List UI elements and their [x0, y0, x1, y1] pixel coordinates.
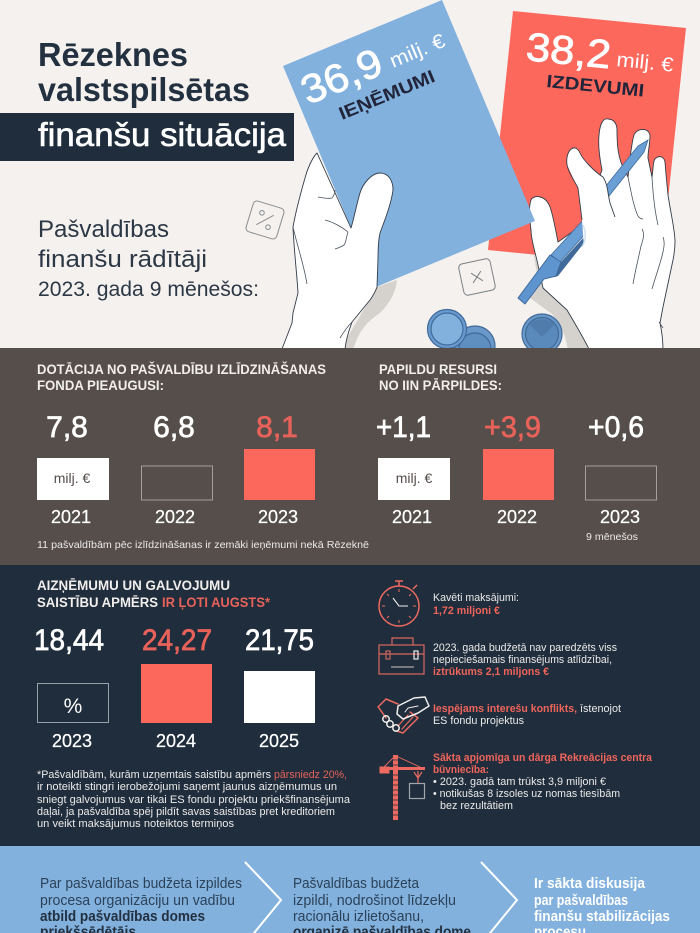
text: recreation centre: [433, 752, 653, 812]
bar chart: grant: 6,8: [153, 411, 195, 444]
pen: [518, 140, 648, 304]
text: late payments: Kavēti maksājumi:: [433, 592, 519, 604]
bar chart: grant: [37, 411, 315, 527]
text: discussion started: finanšu stabilizācijas: [534, 908, 670, 925]
bar chart: extra resources: 2023: [600, 507, 640, 527]
subtitle: 2023. gada 9 mēnešos:: [38, 278, 259, 301]
text: mayor responsibility: Par pašvaldības budžeta izpildes: [40, 875, 242, 892]
text: conflict of interest: īstenojot: [580, 703, 621, 715]
text: salary shortfall: 2023. gada budžetā nav paredzēts viss: [433, 642, 617, 654]
heading: grant: DOTĀCIJA NO PAŠVALDĪBU IZLĪDZINĀŠANAS: [37, 362, 326, 377]
hand shadows: [340, 250, 590, 350]
red paper: expenses: [488, 11, 686, 267]
icon: multiply card: [458, 258, 496, 296]
footnote: debt: *Pašvaldībām, kurām uzņemtais saistību apmērs: [37, 769, 271, 781]
bar chart: extra resources: +3,9: [484, 411, 541, 444]
red paper: expenses: milj. €: [616, 49, 674, 77]
bar chart: extra resources: milj. €: [396, 470, 432, 486]
panel: grants and extra resources: [0, 348, 700, 565]
heading: debt: AIZŅĒMUMU UN GALVOJUMU: [37, 578, 230, 593]
title: valstspilsētas: [38, 71, 250, 108]
text: mayor responsibility: [40, 875, 242, 933]
index finger and palm over the pen: [567, 148, 615, 270]
bar chart: debt: 21,75: [245, 624, 314, 657]
bar chart: grant: 2023: [258, 507, 298, 527]
text: salary shortfall: [433, 642, 617, 678]
title: Rēzeknes: [38, 36, 188, 73]
bar chart: debt: 2024: [156, 731, 196, 751]
coins: [428, 310, 562, 366]
heading: extra resources: NO IIN PĀRPILDES:: [379, 378, 502, 393]
bar chart: debt: 2025: [259, 731, 299, 751]
subtitle: Pašvaldības: [38, 216, 169, 243]
red paper: expenses: IZDEVUMI: [546, 71, 645, 101]
icon: stopwatch: [379, 581, 419, 626]
heading: debt: IR ĻOTI AUGSTS*: [162, 595, 271, 610]
text: recreation centre: bez rezultātiem: [440, 800, 513, 812]
heading: debt: SAISTĪBU APMĒRS: [37, 595, 158, 610]
bar chart: debt: 2023: [52, 731, 92, 751]
red paper: expenses: 38,2: [524, 25, 613, 77]
text: late payments: 1,72 miljoni €: [433, 605, 500, 617]
text: salary shortfall: nepieciešamais finansējums atlīdzībai,: [433, 654, 612, 666]
text: recreation centre: Sākta apjomīga un dārga Rekreācijas centra: [433, 752, 653, 764]
bar chart: debt: [34, 624, 315, 751]
blue paper: revenue: 36,9: [295, 41, 389, 113]
text: conflict of interest: ES fondu projektus: [433, 715, 524, 727]
bar chart: debt: 24,27: [142, 624, 212, 657]
icon: percent card: [245, 200, 285, 240]
icon: briefcase: [379, 638, 424, 674]
text: mayor responsibility: atbild pašvaldības domes: [40, 908, 205, 925]
icon: construction crane: [380, 755, 425, 820]
text: recreation centre: • 2023. gadā tam trūkst 3,9 miljoni €: [433, 776, 606, 788]
bar chart: extra resources: 2021: [392, 507, 432, 527]
arrow: chevron one: [245, 862, 281, 933]
bar chart: debt: %: [64, 695, 82, 718]
text: discussion started: [534, 875, 670, 933]
title: finanšu situācija: [38, 116, 287, 153]
text: late payments: [433, 592, 519, 617]
text: mayor responsibility: procesa organizāciju un vadību: [40, 892, 235, 909]
blue paper: revenue: [283, 0, 535, 287]
bar chart: grant: 7,8: [46, 411, 88, 444]
heading: extra resources: PAPILDU RESURSI: [379, 362, 497, 377]
blue paper: revenue: IEŅĒMUMI: [336, 66, 438, 124]
footnote: debt: daļai, ja pašvaldība spēj pildīt savas saistības pret kreditoriem: [37, 806, 335, 818]
panel: debt obligations: [0, 565, 700, 846]
right hand: [530, 119, 675, 351]
subtitle: [38, 216, 259, 301]
left hand: [282, 153, 393, 349]
text: conflict of interest: [433, 703, 621, 727]
blue paper: revenue: milj. €: [386, 30, 448, 73]
text: conflict of interest: Iespējams interešu konflikts,: [433, 703, 577, 715]
footnote: debt: un veikt maksājumus noteiktos termiņos: [37, 818, 234, 830]
bar chart: grant: 2022: [155, 507, 195, 527]
footnote: debt: ir noteikti stingri ierobežojumi saņemt jaunus aizņēmumus un: [37, 781, 337, 793]
bar chart: grant: 8,1: [256, 411, 298, 444]
bar chart: grant: milj. €: [54, 470, 90, 486]
bar chart: extra resources: 2022: [497, 507, 537, 527]
subtitle: finanšu rādītāji: [38, 246, 207, 273]
bar chart: extra resources: 9 mēnešos: [586, 531, 638, 543]
icon: handshake: [378, 697, 429, 733]
heading: extra resources: [379, 362, 502, 393]
heading: grant: [37, 362, 326, 393]
text: council organises: Pašvaldības budžeta: [293, 875, 420, 892]
heading: debt: [37, 578, 271, 610]
footnote: debt: sniegt galvojumus var tikai ES fondu projektu priekšfinansējuma: [37, 794, 351, 806]
text: council organises: izpildi, nodrošinot līdzekļu: [293, 892, 456, 909]
bar chart: grant: 2021: [51, 507, 91, 527]
text: council organises: [293, 875, 471, 933]
text: discussion started: par pašvaldības: [534, 892, 628, 909]
text: discussion started: Ir sākta diskusija: [534, 875, 646, 892]
bar chart: debt: 18,44: [34, 624, 104, 657]
panel: responsibility flow: [0, 846, 700, 933]
footnote: grant: 11 pašvaldībām pēc izlīdzināšanas ir zemāki ieņēmumi nekā Rēzeknē: [37, 539, 369, 551]
text: salary shortfall: iztrūkums 2,1 miljons €: [433, 666, 549, 678]
arrow: chevron two: [481, 862, 517, 933]
bar chart: extra resources: +1,1: [376, 411, 431, 444]
text: recreation centre: • notikušas 8 izsoles uz nomas tiesībām: [433, 788, 620, 800]
heading: grant: FONDA PIEAUGUSI:: [37, 378, 164, 393]
bar chart: extra resources: +0,6: [588, 411, 644, 444]
text: recreation centre: būvniecība:: [433, 764, 489, 776]
title: [0, 36, 294, 161]
footnote: debt: [37, 769, 351, 830]
bar chart: extra resources: [376, 411, 656, 543]
text: council organises: racionālu izlietošanu,: [293, 908, 424, 925]
footnote: debt: pārsniedz 20%,: [274, 769, 347, 781]
